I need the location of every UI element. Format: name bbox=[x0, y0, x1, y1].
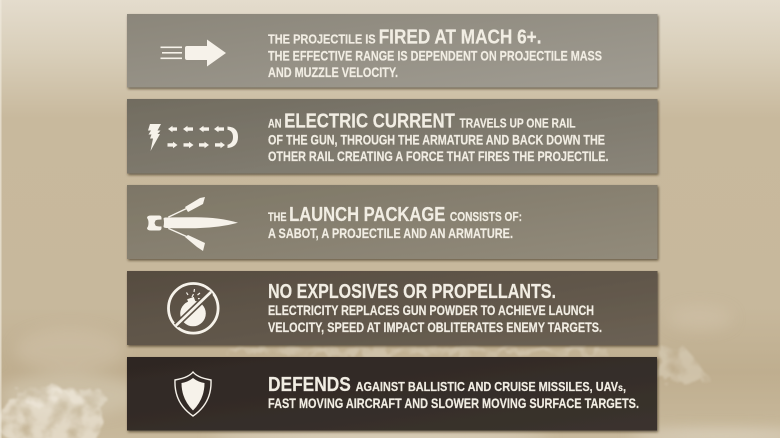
text: no explosives: NO EXPLOSIVES OR PROPELLANTS. bbox=[268, 280, 556, 303]
panel 5: defends bbox=[127, 357, 657, 430]
text: electric current: OTHER RAIL CREATING A FORCE THAT FIRES THE PROJECTILE. bbox=[268, 149, 608, 164]
text: launch package: A SABOT, A PROJECTILE AND AN ARMATURE. bbox=[268, 226, 513, 241]
text: defends: DEFENDS AGAINST BALLISTIC AND CRUISE MISSILES, UAVs, bbox=[268, 373, 626, 396]
text: electric current: AN ELECTRIC CURRENT TRAVELS UP ONE RAIL bbox=[268, 110, 576, 132]
text: no explosives bbox=[268, 280, 602, 335]
icon: lightning and current path bbox=[148, 124, 238, 151]
text: fired at Mach 6+: THE PROJECTILE IS FIRED AT MACH 6+. bbox=[268, 26, 542, 48]
panel 1: fired at Mach 6+ bbox=[127, 14, 658, 88]
text: defends: FAST MOVING AIRCRAFT AND SLOWER MOVING SURFACE TARGETS. bbox=[268, 396, 639, 411]
text: defends bbox=[268, 373, 639, 411]
icon: speeding arrow bbox=[160, 40, 226, 66]
text: launch package: THE LAUNCH PACKAGE CONSISTS OF: bbox=[268, 203, 522, 226]
panel 2: electric current bbox=[127, 99, 658, 174]
icon: shield bbox=[175, 372, 211, 416]
text: launch package bbox=[268, 203, 522, 241]
text: electric current: OF THE GUN, THROUGH THE ARMATURE AND BACK DOWN THE bbox=[268, 132, 605, 148]
background: soft haze bbox=[0, 306, 780, 438]
text: electric current bbox=[268, 110, 608, 164]
background: left edge highlight bbox=[0, 0, 2, 438]
background: smoke clouds bbox=[0, 345, 706, 438]
text: fired at Mach 6+: THE EFFECTIVE RANGE IS DEPENDENT ON PROJECTILE MASS bbox=[268, 48, 602, 64]
text: no explosives: ELECTRICITY REPLACES GUN POWDER TO ACHIEVE LAUNCH bbox=[268, 303, 594, 318]
text: fired at Mach 6+ bbox=[268, 26, 602, 80]
text: fired at Mach 6+: AND MUZZLE VELOCITY. bbox=[268, 65, 398, 80]
panel 4: no explosives bbox=[127, 271, 658, 345]
icon: launch package bbox=[147, 197, 238, 251]
text: no explosives: VELOCITY, SPEED AT IMPACT OBLITERATES ENEMY TARGETS. bbox=[268, 320, 602, 335]
icon: crossed-out bomb bbox=[168, 284, 218, 333]
panel 3: launch package bbox=[127, 185, 658, 259]
